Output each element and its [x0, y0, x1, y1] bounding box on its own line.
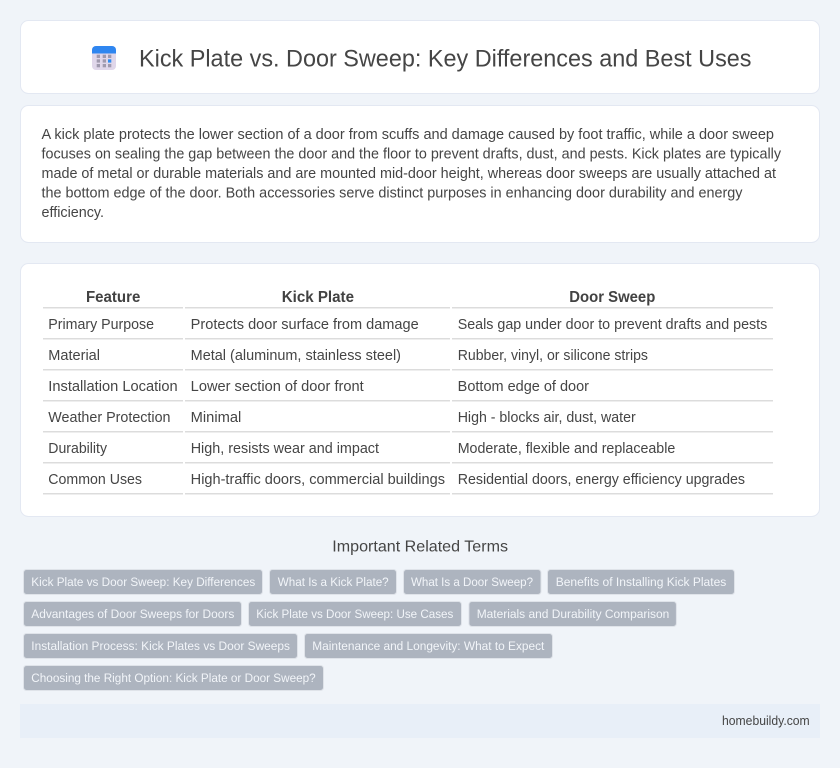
tag: Kick Plate vs Door Sweep: Use Cases [256, 607, 453, 621]
table row: installation location: Lower section of door front [191, 379, 364, 395]
tag [24, 634, 298, 658]
text block: introduction paragraph: efficiency. [42, 205, 104, 221]
table row: material: Material [48, 348, 100, 364]
tag [548, 570, 734, 594]
tag: Benefits of Installing Kick Plates [556, 575, 726, 589]
tag: Materials and Durability Comparison [477, 607, 669, 621]
table row: primary purpose: Protects door surface from damage [191, 317, 419, 333]
table row: weather protection: Weather Protection [48, 410, 170, 426]
table row: durability: Durability [48, 441, 108, 457]
tag: Choosing the Right Option: Kick Plate or Door Sweep? [31, 671, 316, 685]
table row: common uses [43, 472, 773, 494]
tag [24, 570, 262, 594]
table row: durability: High, resists wear and impact [191, 441, 379, 457]
table row: installation location: Bottom edge of door [458, 379, 589, 395]
table row: weather protection: High - blocks air, dust, water [458, 410, 636, 426]
table row: weather protection: Minimal [191, 410, 241, 426]
panel: introduction [20, 106, 820, 242]
title: Kick Plate vs. Door Sweep: Key Differences and Best Uses [139, 46, 752, 72]
table row: common uses: Residential doors, energy efficiency upgrades [458, 472, 745, 488]
table header row [43, 289, 773, 308]
tag [248, 602, 462, 626]
tag: Maintenance and Longevity: What to Expect [312, 639, 545, 653]
panel: comparison table [20, 264, 820, 516]
footer: homebuildy.com [722, 714, 810, 728]
footer [20, 704, 820, 738]
table row: common uses: High-traffic doors, commercial buildings [191, 472, 445, 488]
text block: introduction paragraph: focuses on sealing the gap between the door and the floor to prevent drafts, dust, and pests. Kick plates are typically [42, 146, 782, 162]
table row: material: Metal (aluminum, stainless steel) [191, 348, 401, 364]
icon: calendar [92, 46, 116, 70]
table row: primary purpose: Seals gap under door to prevent drafts and pests [458, 317, 767, 333]
table row: installation location [43, 379, 773, 402]
text block: introduction paragraph: the bottom edge of the door. Both accessories serve distinct purposes in enhancing door durability and energy [42, 186, 743, 202]
text block: introduction paragraph: A kick plate protects the lower section of a door from scuffs and damage caused by foot traffic, while a door sweep [42, 127, 774, 143]
tag [270, 570, 396, 594]
text block: introduction paragraph [42, 127, 782, 221]
table header row: Feature [86, 289, 140, 306]
table row: material [43, 348, 773, 370]
tag: Kick Plate vs Door Sweep: Key Differences [31, 575, 255, 589]
table header row: Kick Plate [282, 289, 354, 306]
tag [24, 666, 324, 690]
tag: Installation Process: Kick Plates vs Door Sweeps [31, 639, 290, 653]
table row: durability [43, 441, 773, 464]
table row: material: Rubber, vinyl, or silicone strips [458, 348, 648, 364]
table row: weather protection [43, 410, 773, 432]
table header row: Door Sweep [569, 289, 656, 306]
tag [469, 602, 676, 626]
tag [404, 570, 541, 594]
panel: title header [20, 20, 820, 94]
tag: What Is a Door Sweep? [411, 575, 533, 589]
table row: common uses: Common Uses [48, 472, 142, 488]
text block: introduction paragraph: made of metal or durable materials and are mounted mid-door height, whereas door sweeps are usually attached at [42, 166, 776, 182]
tag: What Is a Kick Plate? [278, 575, 389, 589]
heading: important related terms: Important Related Terms [332, 539, 508, 556]
tag [24, 602, 242, 626]
table row: installation location: Installation Location [48, 379, 178, 395]
table row: primary purpose [43, 317, 773, 340]
table row: primary purpose: Primary Purpose [48, 317, 154, 333]
tag [304, 634, 552, 658]
tag: Advantages of Door Sweeps for Doors [31, 607, 234, 621]
panel: related term tags [24, 570, 734, 690]
table row: durability: Moderate, flexible and replaceable [458, 441, 675, 457]
